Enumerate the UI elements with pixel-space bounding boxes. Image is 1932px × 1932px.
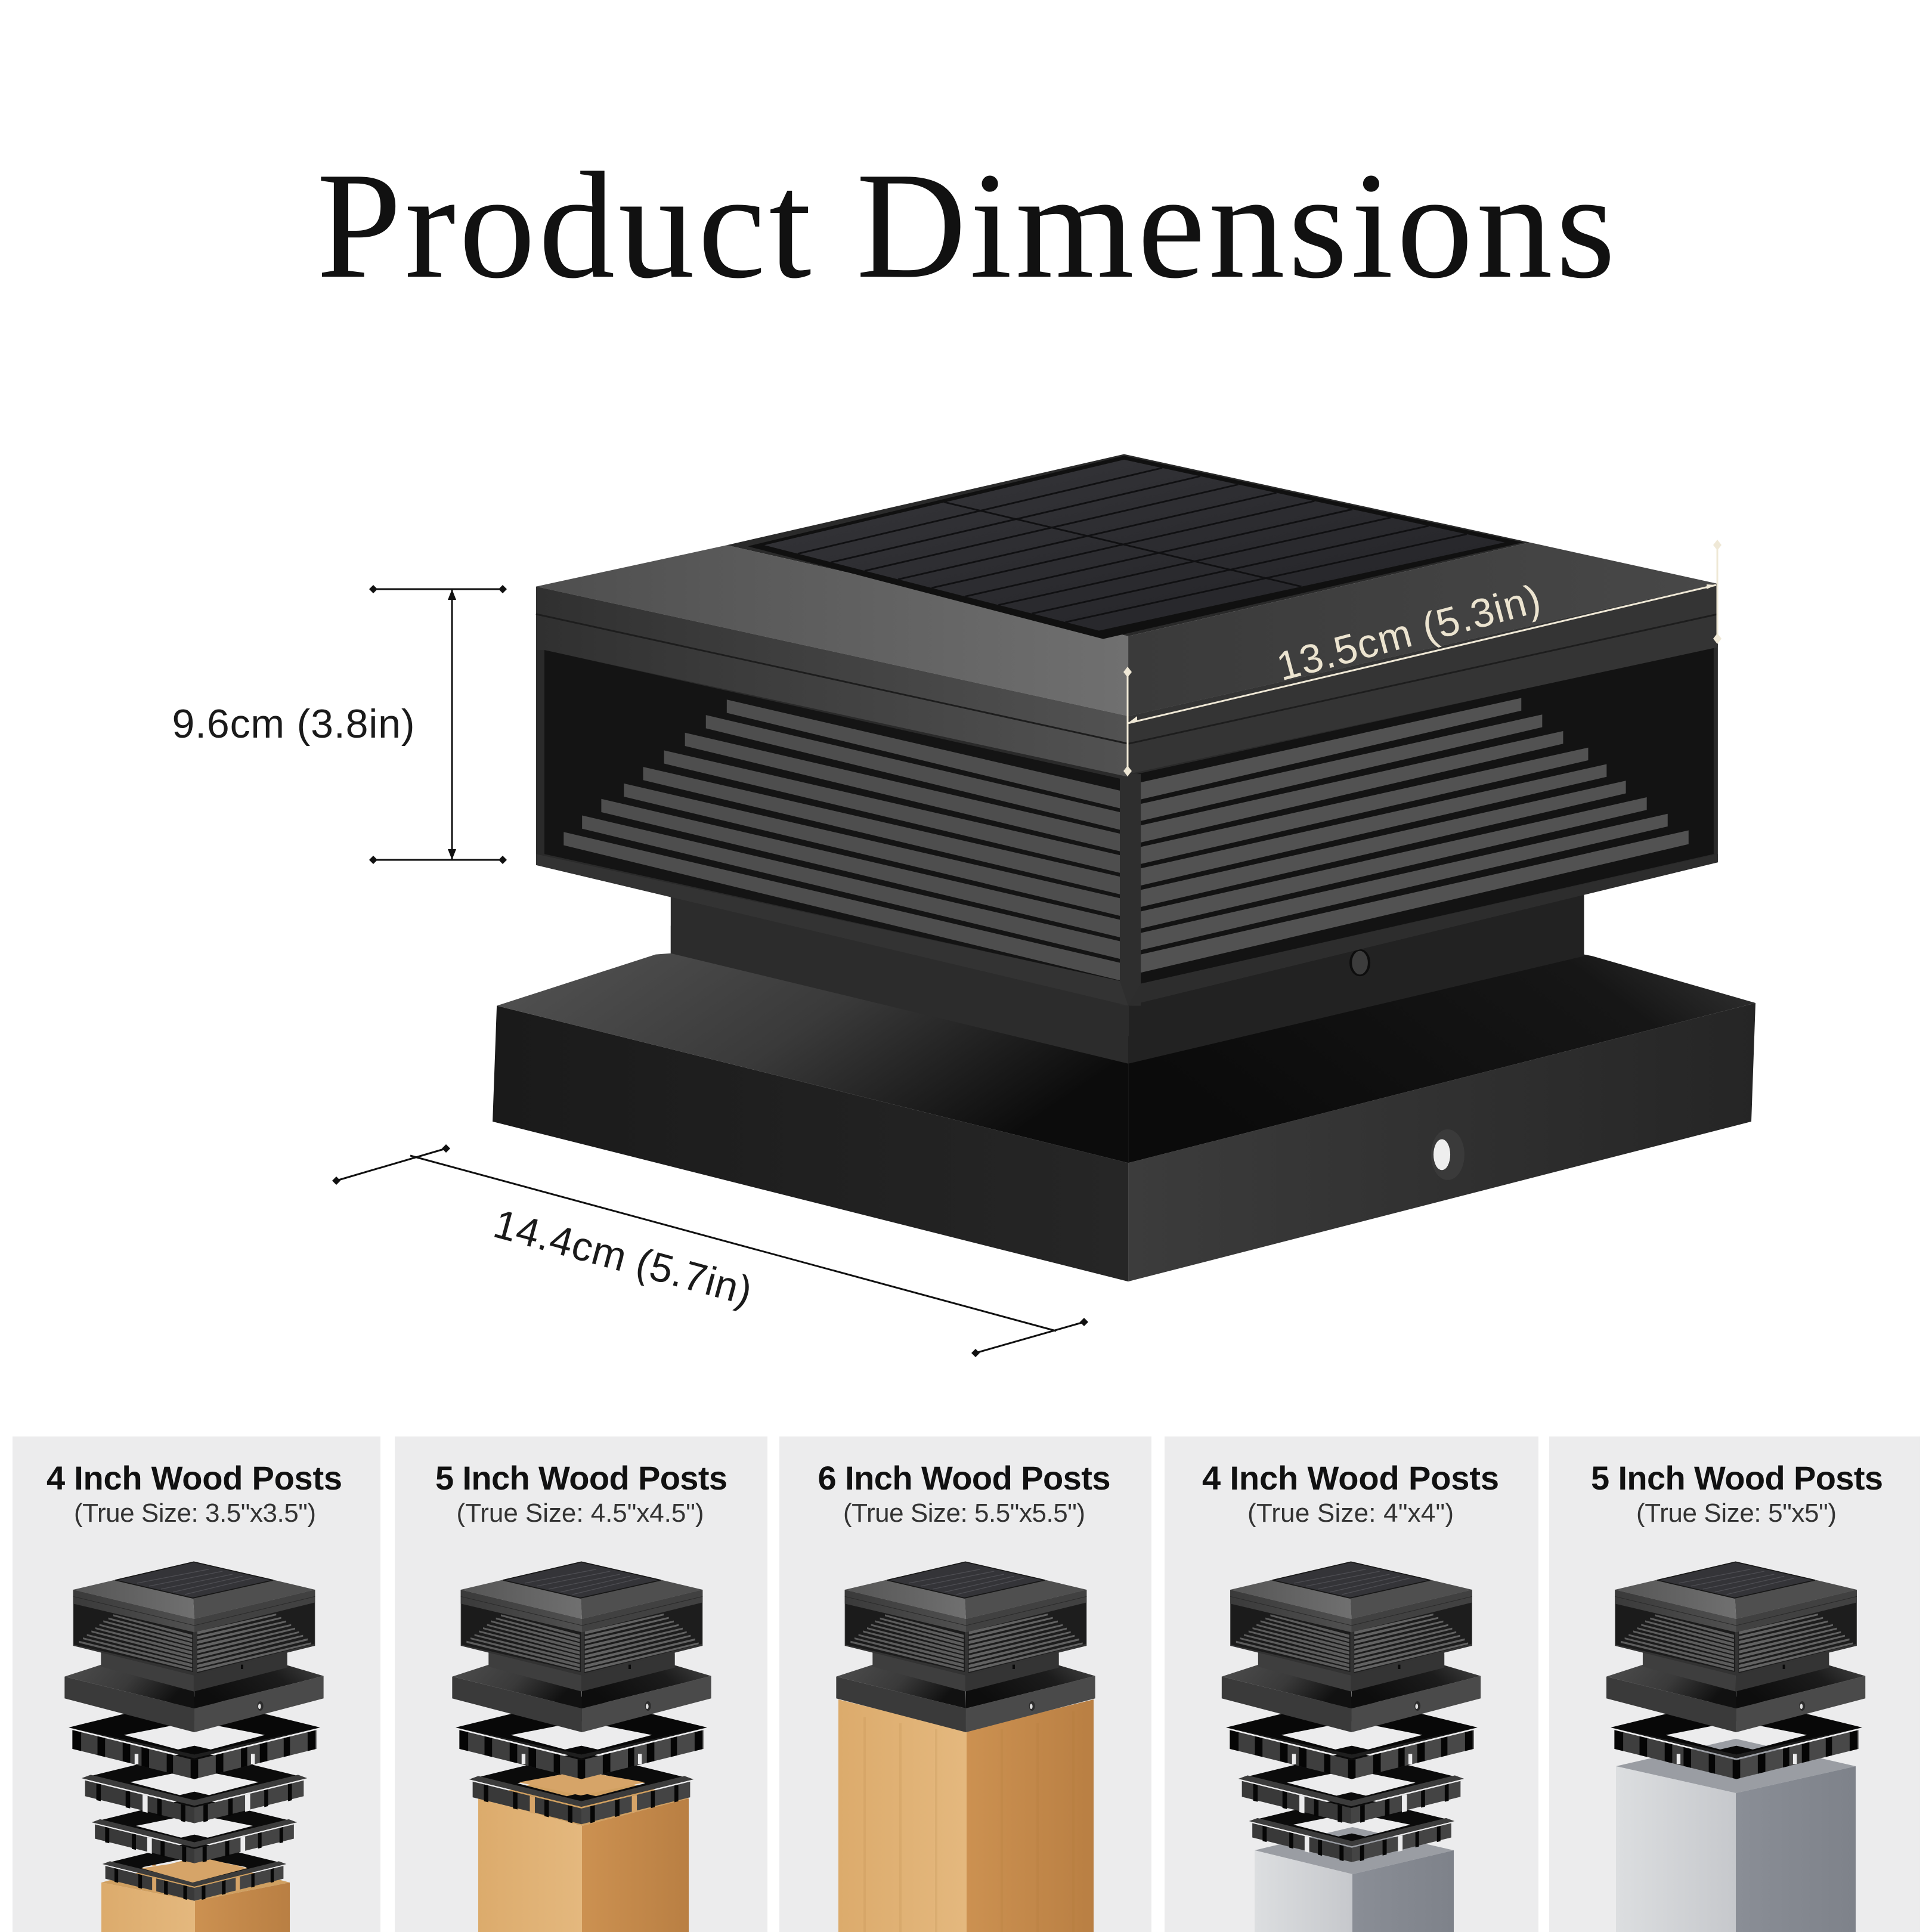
lamp: panel 5	[1606, 1562, 1865, 1732]
heading: panel 2: 5 Inch Wood Posts	[435, 1459, 727, 1497]
dimension: top width	[1123, 540, 1722, 776]
heading: panel 2: (True Size: 4.5"x4.5")	[457, 1498, 704, 1528]
adapter ring stack: panel 1	[69, 1696, 320, 1905]
heading: panel 3: (True Size: 5.5"x5.5")	[843, 1498, 1085, 1528]
adapter ring stack: panel 2	[456, 1696, 707, 1829]
dimension: top width: 13.5cm (5.3in)	[1272, 576, 1545, 689]
heading: panel 5	[1591, 1459, 1883, 1528]
heading: panel 2	[435, 1459, 727, 1528]
product: main solar post cap	[493, 454, 1755, 1281]
panel: 4 inch wood posts 3.5	[13, 1436, 380, 1932]
grey post: panel 4	[1255, 1827, 1454, 1932]
heading: panel 4: 4 Inch Wood Posts	[1202, 1459, 1499, 1497]
dimension: base width: 14.4cm (5.7in)	[489, 1201, 757, 1314]
heading: panel 3: 6 Inch Wood Posts	[818, 1459, 1110, 1497]
lamp: panel 3	[836, 1562, 1095, 1732]
heading: panel 3	[818, 1459, 1110, 1528]
heading: panel 5: 5 Inch Wood Posts	[1591, 1459, 1883, 1497]
heading: panel 5: (True Size: 5"x5")	[1636, 1498, 1837, 1528]
title: Product Dimensions	[317, 141, 1615, 310]
dimension: height: 9.6cm (3.8in)	[172, 701, 415, 747]
lamp: panel 4	[1222, 1562, 1481, 1732]
heading: panel 1: 4 Inch Wood Posts	[47, 1459, 342, 1497]
wood post: panel 3	[838, 1699, 1094, 1932]
panel: 6 inch wood posts	[779, 1436, 1151, 1932]
adapter ring stack: panel 4	[1226, 1696, 1478, 1866]
heading: panel 4	[1202, 1459, 1499, 1528]
panel: 4 inch wood posts 4x4	[1165, 1436, 1538, 1932]
heading: panel 4: (True Size: 4"x4")	[1247, 1498, 1454, 1528]
wood post: panel 1	[101, 1857, 290, 1932]
heading: panel 1	[47, 1459, 342, 1528]
wood post: panel 2	[478, 1771, 689, 1932]
lamp: panel 2	[452, 1562, 711, 1732]
panel: 5 inch wood posts 4.5	[395, 1436, 767, 1932]
grey post: panel 5	[1616, 1739, 1856, 1932]
dimension: height	[172, 585, 507, 864]
dimension: base width	[332, 1144, 1088, 1357]
adapter ring: panel 5	[1611, 1696, 1862, 1783]
lamp: panel 1	[64, 1562, 324, 1732]
panel: 5 inch wood posts 5x5	[1549, 1436, 1920, 1932]
heading: panel 1: (True Size: 3.5"x3.5")	[74, 1498, 316, 1528]
